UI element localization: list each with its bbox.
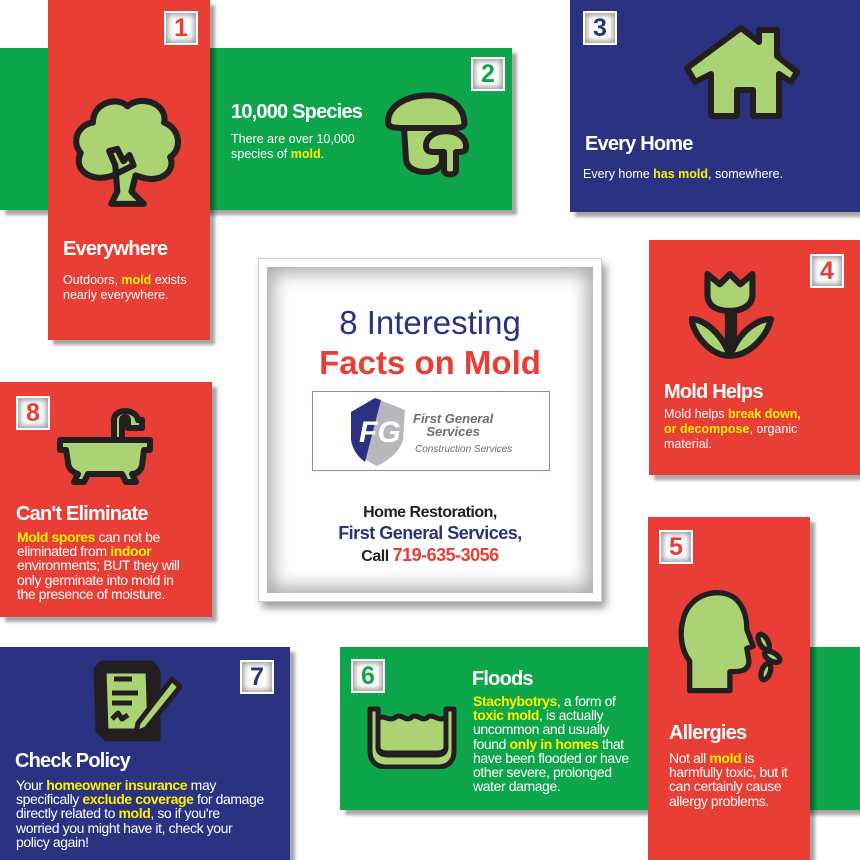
badge 8 [16,396,50,430]
text 8: eliminated from indoor [17,543,151,559]
heading 4: Mold Helps [664,381,763,403]
badge 5 [659,530,693,564]
badge 3: 3 [593,14,607,42]
icon: head sneezing [678,590,782,694]
panel 3: every home [570,0,860,212]
text 8: Mold spores can not be [17,529,160,545]
text 6 [473,693,629,794]
contact text [338,504,522,565]
text 7: policy again! [16,834,89,850]
logo [312,391,550,471]
text 5: Not all mold is [669,750,754,766]
text 7 [16,777,264,850]
logo: Services [426,424,480,439]
badge 1: 1 [174,14,188,42]
badge 2 [471,57,505,91]
text 5: harmfully toxic, but it [669,764,787,780]
contact text: Home Restoration, [363,504,497,521]
text 3: Every home has mold, somewhere. [583,167,783,181]
text 7: specifically exclude coverage for damage [16,791,264,807]
badge 5: 5 [669,533,683,561]
icon: mushroom [385,92,470,178]
badge 2: 2 [481,60,495,88]
panel 2: 10,000 species [0,48,512,210]
center box: title and logo [258,258,602,602]
text 7: Your homeowner insurance may [16,777,216,793]
title: 8 Interesting [339,304,521,341]
icon: house [684,24,800,119]
text 8: only germinate into mold in [17,572,174,588]
text 6: water damage. [473,778,560,794]
heading 3: Every Home [585,133,693,155]
text 6: other severe, prolonged [473,764,612,780]
text 8: environments; BUT they will [17,557,179,573]
title: Facts on Mold [319,344,541,381]
icon: shield FG [351,398,405,466]
badge 4 [810,254,844,288]
text 6: have been flooded or have [473,750,629,766]
icon: shield FG: FG [359,416,401,449]
logo: Construction Services [415,444,512,455]
title [319,304,541,381]
panel 5: allergies [648,517,810,860]
panel 7: check policy [0,647,290,860]
icon: basin [368,706,456,769]
text 6: found only in homes that [473,736,624,752]
text 6: Stachybotrys, a form of [473,693,616,709]
badge 8: 8 [26,399,40,427]
text 8 [17,529,179,602]
contact text: Call 719-635-3056 [361,545,499,565]
text 7: worried you might have it, check your [16,820,232,836]
text 6: toxic mold, is actually [473,707,603,723]
text 5: allergy problems. [669,793,769,809]
heading 5: Allergies [669,722,746,744]
text 5: can certainly cause [669,778,781,794]
text 1: Outdoors, mold exists nearly everywhere. [63,273,187,302]
text 8: the presence of moisture. [17,586,165,602]
panel 4: mold helps [649,240,860,475]
panel 1: everywhere [48,0,210,340]
badge 4: 4 [820,257,834,285]
badge 6 [351,659,385,693]
text 2: There are over 10,000 species of mold. [231,132,355,161]
badge 3 [583,11,617,45]
icon: tree [73,98,182,207]
heading 2: 10,000 Species [231,101,362,123]
text 4: Mold helps break down, or decompose, organic material. [664,407,801,451]
icon: tulip [689,271,774,359]
badge 7 [240,660,274,694]
text 5 [669,750,788,809]
logo: First General [413,411,493,426]
heading 6: Floods [472,668,533,690]
text 6: uncommon and usually [473,721,609,737]
panel 6: floods [340,647,860,810]
heading 8: Can't Eliminate [16,503,148,525]
icon: notepad with pencil [94,660,183,742]
text 7: directly related to mold, so if you're [16,805,220,821]
badge 1 [164,11,198,45]
icon: bathtub [57,408,153,485]
panel 8: can't eliminate [0,382,212,617]
contact text: First General Services, [338,523,522,543]
badge 7: 7 [250,663,264,691]
heading 7: Check Policy [15,750,130,772]
heading 1: Everywhere [63,238,167,260]
badge 6: 6 [361,662,375,690]
